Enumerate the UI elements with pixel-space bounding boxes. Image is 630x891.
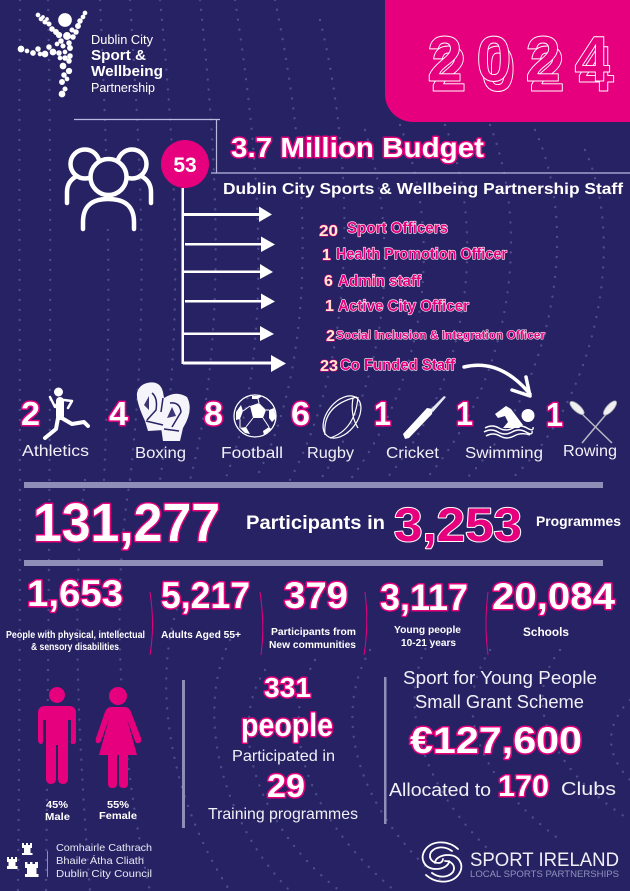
list: staff roles: Active City Officer	[338, 298, 469, 315]
sport: athletics: 2	[21, 395, 40, 432]
panel: small grant scheme: Small Grant Scheme	[415, 692, 584, 712]
list: staff roles: 23	[320, 358, 338, 375]
stat: new communities: New communities	[269, 639, 356, 651]
sport: rowing	[546, 396, 619, 460]
logo wordmark: Dublin City	[91, 33, 154, 47]
staff arrows	[182, 188, 286, 372]
panel: small grant scheme: Sport for Young People	[403, 668, 597, 688]
panel: training: 29	[267, 768, 305, 804]
logo: Sport Ireland: LOCAL SPORTS PARTNERSHIPS	[470, 869, 619, 880]
panel: small grant scheme	[389, 668, 616, 803]
headline: participants: 3,253	[394, 498, 522, 551]
sport: cricket: Cricket	[386, 445, 440, 462]
stat: new communities	[269, 575, 356, 651]
council wordmark: Dublin City Council	[56, 868, 152, 880]
headline: participants: Programmes	[536, 513, 621, 529]
council wordmark: Comhairle Cathrach	[56, 842, 152, 854]
sport: athletics: Athletics	[22, 443, 89, 460]
stat: new communities: 379	[284, 575, 348, 616]
arrow: curved to swimming	[464, 365, 530, 396]
panel: training: Training programmes	[208, 806, 358, 823]
panel: training: 331	[264, 672, 311, 703]
council wordmark: Bhaile Átha Cliath	[56, 854, 144, 867]
sport: boxing	[109, 382, 190, 462]
icon: three castles	[7, 843, 38, 877]
sport: boxing: Boxing	[135, 445, 186, 462]
text: male share: 45%	[46, 799, 69, 811]
sport: rugby: Rugby	[307, 445, 354, 462]
sport: rowing: Rowing	[563, 443, 617, 460]
logo wordmark: Sport &	[91, 47, 146, 64]
badge: 53 staff	[161, 140, 209, 188]
list: staff roles: Sport Officers	[347, 220, 448, 237]
logo wordmark: Wellbeing	[91, 63, 163, 80]
stat: disabilities	[6, 573, 145, 653]
stat: adults 55+: 5,217	[161, 575, 250, 616]
stat: schools: 20,084	[492, 576, 615, 617]
stat: adults 55+: Adults Aged 55+	[161, 629, 241, 641]
sport: cricket	[374, 395, 446, 462]
divider bars	[24, 482, 603, 566]
stat: disabilities: People with physical, intellectual	[6, 629, 145, 641]
year heading: 2024	[431, 33, 614, 105]
stat: schools	[492, 576, 615, 639]
stat: young people: Young people	[394, 624, 461, 636]
stat: schools: Schools	[523, 625, 569, 639]
list: staff roles: Co Funded Staff	[340, 357, 456, 374]
headline: participants: 131,277	[33, 493, 220, 553]
stat: young people: 10-21 years	[401, 637, 456, 649]
sports row	[21, 382, 619, 462]
list: staff roles: 6	[324, 273, 333, 290]
list: staff roles: 1	[322, 247, 331, 264]
panel: small grant scheme: Allocated to	[389, 780, 491, 800]
heading: partnership staff: Dublin City Sports & Wellbeing Partnership Staff	[223, 181, 624, 198]
sport: football: 8	[204, 395, 223, 432]
list: staff roles: 2	[326, 328, 335, 345]
icon: dotted figure	[18, 11, 87, 97]
text: female share: Female	[99, 810, 137, 822]
list: staff roles: Admin staff	[338, 273, 422, 290]
text: female share	[99, 799, 137, 822]
stats row	[6, 573, 615, 653]
council wordmark	[56, 842, 152, 880]
text: male share: Male	[45, 811, 70, 823]
sport: football	[204, 395, 283, 462]
Sport Ireland wordmark: SPORT IRELAND	[470, 850, 619, 871]
stat: new communities: Participants from	[271, 626, 356, 638]
headline: participants: Participants in	[246, 513, 385, 534]
sport: swimming: 1	[456, 395, 473, 432]
panel: training	[208, 672, 358, 823]
panel: small grant scheme: Clubs	[561, 778, 616, 799]
pink curved dividers	[150, 592, 488, 655]
stat: young people	[380, 577, 468, 649]
list: staff roles	[319, 220, 545, 375]
badge: 53 staff: 53	[173, 154, 197, 177]
logo: Sport Ireland	[423, 842, 619, 882]
year heading: 2024	[427, 23, 610, 95]
sport: rowing: 1	[546, 396, 563, 433]
stat: adults 55+	[161, 575, 250, 641]
panel: small grant scheme: €127,600	[410, 720, 582, 761]
vertical dividers	[182, 677, 386, 828]
sport: swimming: Swimming	[465, 445, 543, 462]
icon: staff group	[67, 150, 151, 229]
panel: training: people	[241, 707, 333, 743]
list: staff roles: Health Promotion Officer	[336, 246, 507, 263]
text: female share: 55%	[107, 799, 130, 811]
logo: Dublin City Council	[7, 842, 152, 880]
icon: male figure	[38, 687, 76, 784]
panel: training: Participated in	[232, 748, 335, 765]
panel: 2024 year badge	[385, 0, 630, 122]
sport: football: Football	[221, 445, 283, 462]
sport: rugby: 6	[291, 395, 310, 432]
logo wordmark: Partnership	[91, 81, 155, 95]
sport: boxing: 4	[109, 395, 129, 432]
stat: young people: 3,117	[380, 577, 468, 618]
sport: athletics	[21, 388, 89, 460]
stat: disabilities: & sensory disabilities	[31, 641, 119, 653]
list: staff roles: Social Inclusion & Integration Officer	[336, 328, 545, 342]
sport: rugby	[291, 389, 369, 462]
icon: female figure	[96, 687, 141, 788]
headline: participants	[33, 493, 621, 553]
sport: swimming	[456, 395, 543, 462]
list: staff roles: 20	[319, 223, 338, 240]
stat: disabilities: 1,653	[27, 573, 123, 614]
text: male share	[45, 799, 70, 823]
heading: budget: 3.7 Million Budget	[231, 132, 484, 163]
logo: Dublin City Sport & Wellbeing Partnership	[18, 11, 163, 97]
list: staff roles: 1	[325, 298, 334, 315]
icon: spiral	[423, 842, 461, 882]
connector lines	[74, 119, 630, 173]
chart: gender split	[38, 687, 141, 823]
logo wordmark	[91, 33, 163, 95]
panel: small grant scheme: 170	[498, 770, 549, 803]
sport: cricket: 1	[374, 395, 391, 432]
